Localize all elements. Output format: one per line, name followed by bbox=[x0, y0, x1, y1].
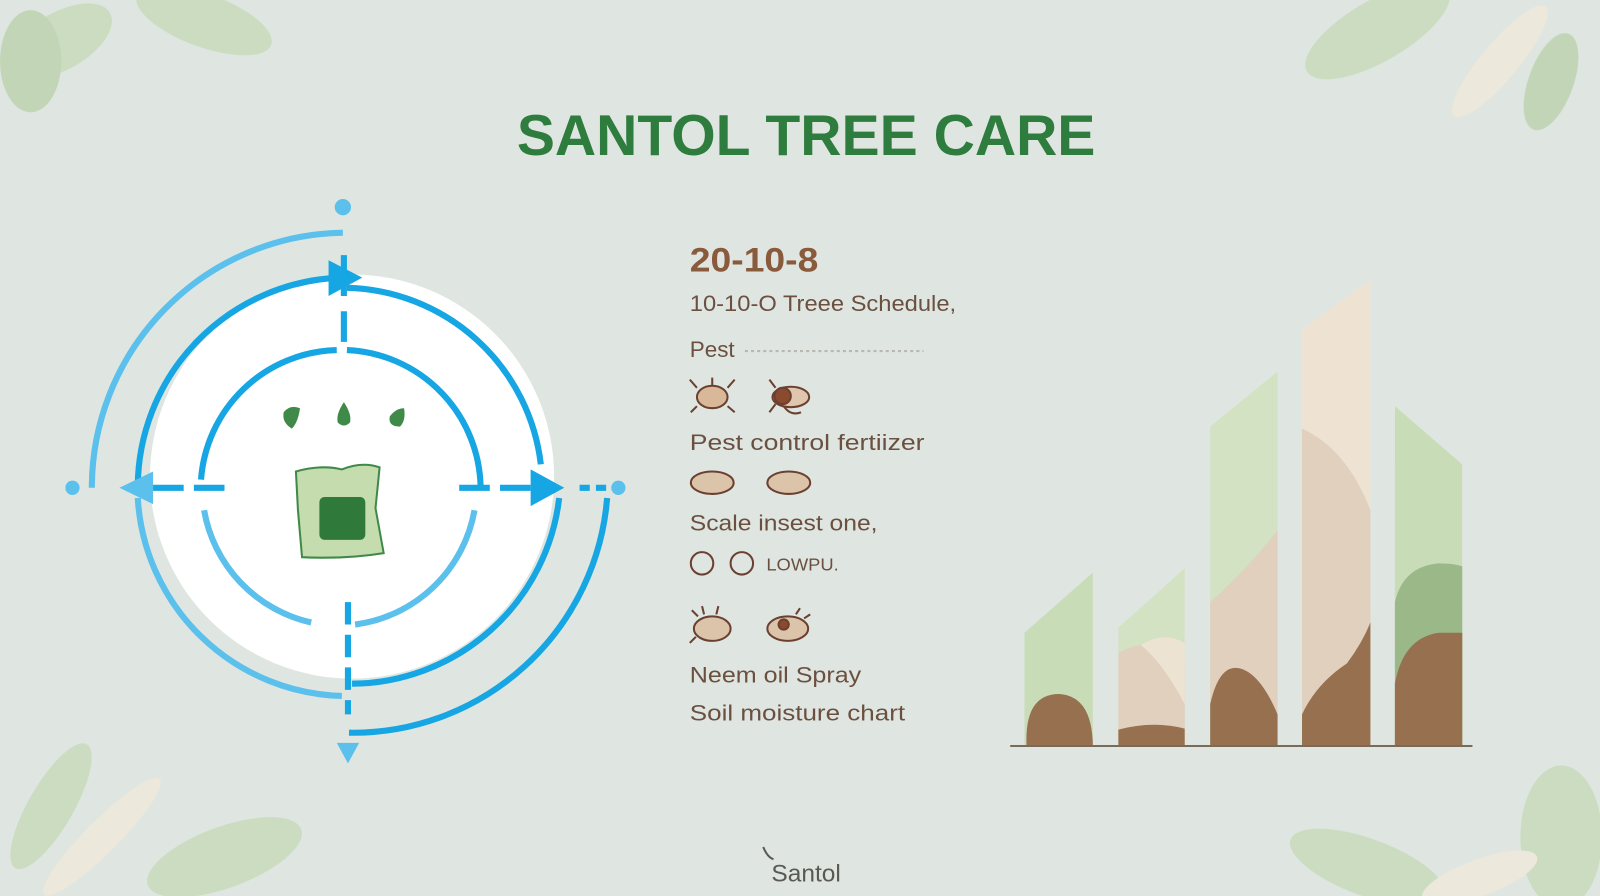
text block: schedule: Scale insest one, bbox=[690, 511, 878, 536]
cycle diagram bbox=[65, 199, 626, 763]
bar 3 bbox=[1210, 371, 1278, 745]
icons: circles bbox=[691, 552, 753, 575]
text block: schedule: 20-10-8 bbox=[690, 241, 818, 279]
bar 1 bbox=[1024, 573, 1093, 745]
text block: schedule: LOWPU. bbox=[766, 554, 839, 574]
bar 5 bbox=[1395, 406, 1462, 745]
text block: schedule: Neem oil Spray bbox=[690, 663, 862, 688]
text block: schedule: Soil moisture chart bbox=[690, 700, 906, 725]
text block: schedule: 10-10-O Treee Schedule, bbox=[690, 291, 956, 316]
title: SANTOL TREE CARE bbox=[517, 104, 1095, 168]
icon: fertilizer bag bbox=[296, 465, 384, 558]
text block: schedule: Pest bbox=[690, 337, 735, 362]
icons: ovals bbox=[691, 471, 810, 494]
bar 2 bbox=[1118, 568, 1185, 745]
logo bbox=[763, 847, 841, 888]
icons: eyes bbox=[690, 606, 810, 643]
icon: leaves bbox=[283, 402, 405, 429]
chart: soil moisture bars bbox=[1010, 280, 1472, 746]
bar 4 bbox=[1302, 280, 1370, 745]
logo: Santol bbox=[771, 861, 841, 888]
text block: schedule: Pest control fertiizer bbox=[690, 430, 925, 455]
icons: pests bbox=[690, 378, 809, 413]
text block: schedule bbox=[690, 241, 956, 725]
